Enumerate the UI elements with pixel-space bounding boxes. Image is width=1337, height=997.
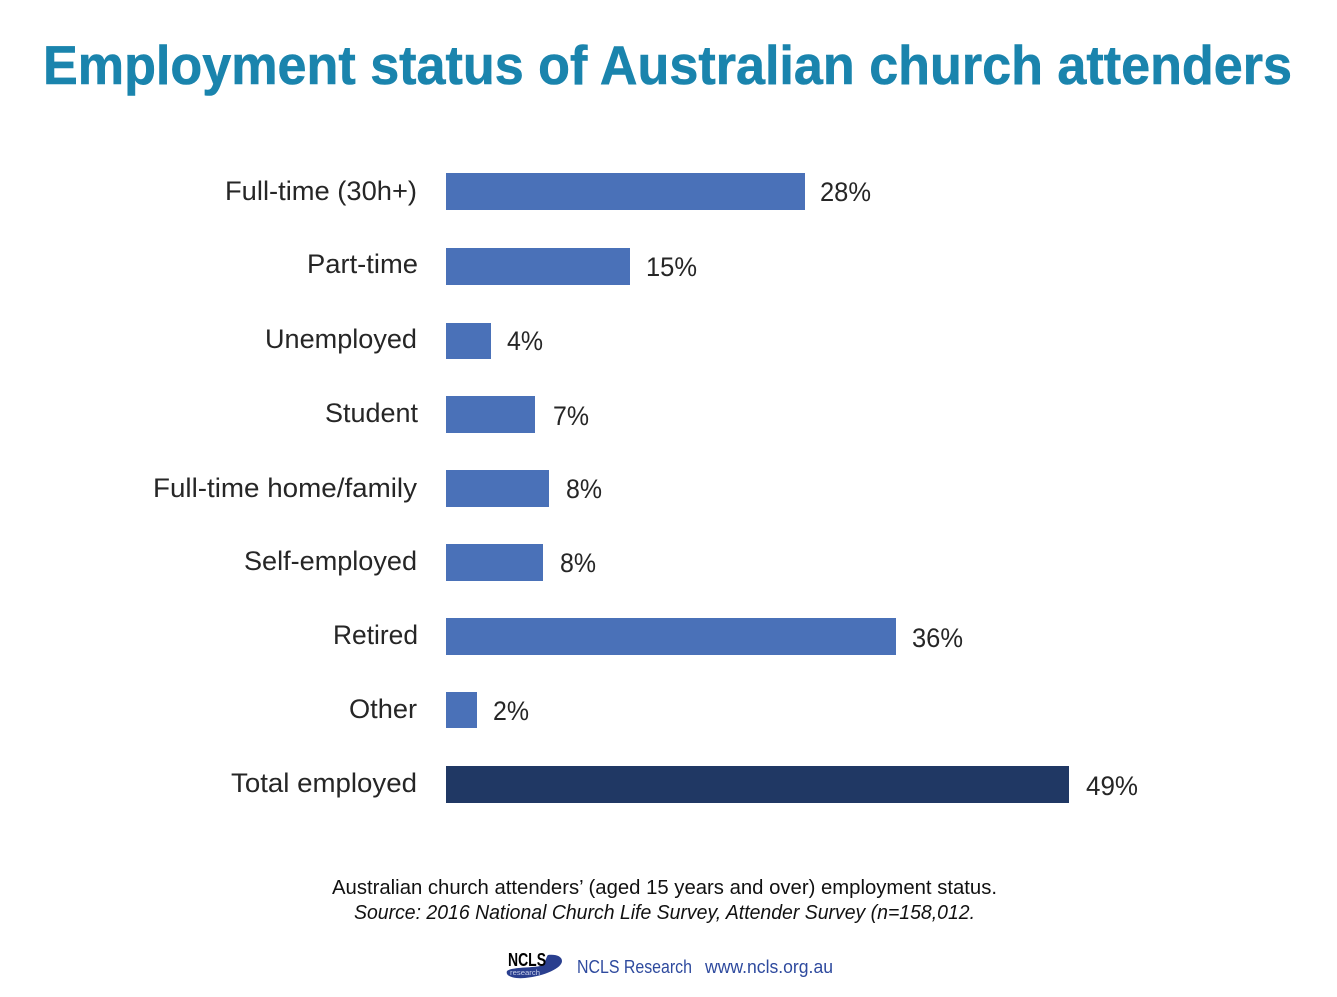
row: Part-time: 15%: [646, 252, 697, 282]
caption: Source: 2016 National Church Life Survey, Attender Survey (n=158,012.: [354, 902, 975, 924]
row: Self-employed: [244, 544, 596, 581]
caption: [332, 877, 997, 924]
caption: Australian church attenders’ (aged 15 years and over) employment status.: [332, 877, 997, 899]
row: Student: 7%: [553, 401, 589, 431]
row: Unemployed: Unemployed: [265, 324, 417, 354]
row: Total employed: [231, 766, 1138, 803]
icon: NCLS logo: research: [510, 970, 540, 977]
row: Self-employed: Self-employed: [244, 546, 417, 576]
row: Full-time home/family: [153, 470, 602, 507]
icon: NCLS logo: [507, 950, 562, 978]
row: Full-time: Full-time (30h+): [225, 176, 417, 206]
row: Unemployed: 4%: [507, 326, 543, 356]
row: Retired: [333, 618, 963, 655]
row: Unemployed: [265, 323, 543, 359]
row: Total employed: 49%: [1086, 771, 1138, 801]
row: Full-time: 28%: [820, 177, 871, 207]
row: Full-time home/family: Full-time home/family: [153, 473, 418, 503]
row: Self-employed: 8%: [560, 548, 596, 578]
row: Student: [325, 396, 589, 433]
row: Other: 2%: [493, 696, 529, 726]
row: Total employed: Total employed: [231, 768, 417, 798]
row: Retired: Retired: [333, 620, 418, 650]
row: Part-time: [307, 248, 697, 285]
row: Other: [349, 692, 529, 728]
row: Student: Student: [325, 398, 418, 428]
footer text: NCLS Research: [577, 957, 692, 977]
title: Employment status of Australian church attenders: [43, 34, 1292, 96]
row: Part-time: Part-time: [307, 249, 418, 279]
bar chart: [153, 173, 1138, 803]
footer text: www.ncls.org.au: [704, 957, 833, 977]
row: Other: Other: [349, 694, 417, 724]
row: Retired: 36%: [912, 623, 963, 653]
icon: NCLS logo: NCLS: [508, 950, 546, 970]
row: Full-time: [225, 173, 871, 210]
footer text: [577, 957, 833, 977]
row: Full-time home/family: 8%: [566, 474, 602, 504]
